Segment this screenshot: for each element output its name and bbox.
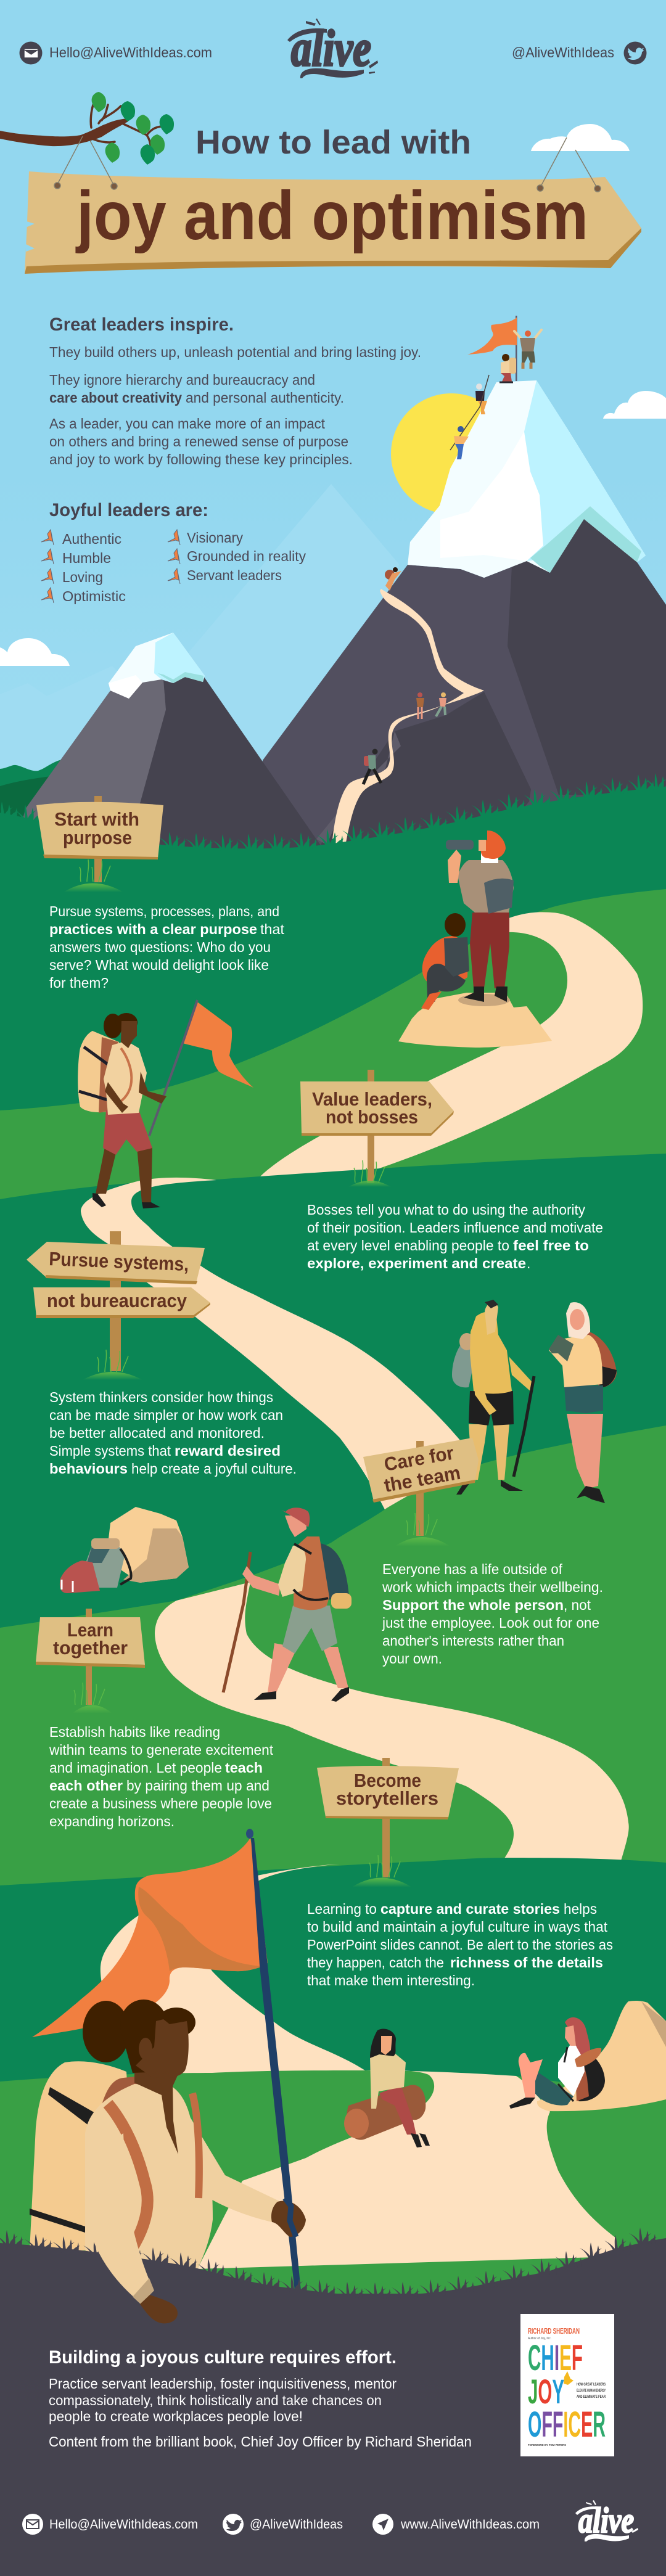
text: learn together: within teams to generate excitement: [49, 1742, 274, 1758]
closing text block: Content from the brilliant book, Chief Joy Officer by Richard Sheridan: [49, 2434, 472, 2450]
text: learn together: by pairing them up and: [126, 1778, 269, 1794]
text: care for the team: just the employee. Look out for one: [382, 1615, 599, 1631]
text: value leaders: at every level enabling people to: [307, 1237, 509, 1253]
two hikers on trail: [416, 692, 446, 719]
light green hill 3: [0, 2070, 666, 2294]
flag cloth: [32, 1838, 268, 2037]
book cover: ELEVATE HUMAN ENERGY: [577, 2389, 606, 2393]
dark green band 2: [0, 1154, 666, 1665]
book cover: RICHARD SHERIDAN: [528, 2326, 580, 2336]
text: value leaders: explore, experiment and create: [307, 1255, 526, 1271]
solo hiker on trail: [363, 749, 381, 784]
text: pursue systems: behaviours: [49, 1461, 128, 1477]
text: become storytellers: PowerPoint slides cannot. Be alert to the stories as: [307, 1937, 613, 1953]
joyful leaders list: Optimistic: [62, 588, 126, 604]
book cover: CHIEF: [528, 2338, 583, 2378]
snow cap: [408, 380, 666, 617]
intro text block: They build others up, unleash potential and bring lasting joy.: [49, 344, 421, 360]
illustration: hiker in headscarf: [549, 1302, 617, 1503]
dark green band 3: [0, 1858, 666, 2158]
heading: how to lead with: How to lead with: [195, 124, 471, 161]
joyful leaders list: Humble: [62, 550, 111, 566]
header: twitter contact: @AliveWithIdeas: [512, 44, 614, 60]
text: pursue systems: [49, 1389, 297, 1477]
intro text block: As a leader, you can make more of an impact: [49, 416, 326, 432]
text: learn together: each other: [49, 1778, 123, 1794]
straps: [108, 2104, 147, 2250]
footer email: Hello@AliveWithIdeas.com: [49, 2517, 198, 2532]
text: become storytellers: capture and curate stories: [380, 1901, 560, 1917]
text: value leaders: of their position. Leaders influence and motivate: [307, 1220, 603, 1236]
text: pursue systems: be better allocated and monitored.: [49, 1425, 265, 1441]
book cover: FOREWORD BY TOM PETERS: [528, 2443, 566, 2447]
torso: [85, 2084, 213, 2281]
text: pursue systems: Simple systems that: [49, 1443, 171, 1459]
trail climber: [385, 567, 401, 591]
sign: value leaders: Value leaders,: [312, 1088, 432, 1110]
illustration: woman sitting on log: [344, 2029, 430, 2147]
sign: value leaders: [300, 1070, 454, 1187]
text: learn together: and imagination. Let people: [49, 1760, 222, 1776]
closing text block: [49, 2347, 472, 2450]
text: start with purpose: serve? What would delight look like: [49, 957, 269, 973]
footer twitter: @AliveWithIdeas: [250, 2517, 343, 2532]
branch with leaves: [0, 92, 174, 165]
right arm: [189, 2115, 281, 2222]
sign mound: [83, 1350, 142, 1380]
footer website: www.AliveWithIdeas.com: [400, 2517, 540, 2532]
book cover: Author of Joy, Inc.: [528, 2337, 551, 2340]
arms: [105, 1072, 166, 1113]
illustration: woman sitting by rock: [509, 2017, 605, 2109]
book cover: JOY: [528, 2372, 564, 2411]
main grass hill: [0, 787, 666, 2294]
sign mound: [395, 1513, 450, 1546]
book cover: HOW GREAT LEADERS: [577, 2383, 606, 2387]
text: care for the team: Everyone has a life outside of: [382, 1561, 563, 1577]
sign mound: [348, 1160, 391, 1187]
illustration: woman with flag: [78, 1000, 253, 1208]
illustration: hiker with walking stick: [223, 1507, 352, 1702]
text: learn together: create a business where people love: [49, 1795, 272, 1811]
footer twitter: [223, 2514, 343, 2535]
legs and shorts: [96, 1147, 152, 1202]
sign: become storytellers: Become: [354, 1770, 421, 1791]
intro text block: and personal authenticity.: [186, 390, 344, 406]
sign: become storytellers: storytellers: [336, 1787, 438, 1809]
text: care for the team: , not: [564, 1597, 591, 1613]
path section 4: [101, 1864, 382, 2078]
intro text block: and joy to work by following these key principles.: [49, 451, 353, 467]
jumping hiker: [514, 330, 541, 369]
sign mound: [72, 1683, 112, 1713]
illustration: hiker in yellow hoodie: [452, 1300, 534, 1495]
text: value leaders: .: [527, 1255, 530, 1271]
book cover: AND ELIMINATE FEAR: [577, 2395, 606, 2399]
sign: learn together: together: [53, 1637, 128, 1659]
sign: learn together: [36, 1609, 145, 1713]
joyful leaders list: Joyful leaders are:: [49, 500, 208, 520]
sand rock: [398, 993, 552, 1048]
collar: [162, 2084, 178, 2154]
summit climbers: [450, 330, 541, 459]
text: become storytellers: Learning to: [307, 1901, 377, 1917]
title sign: [25, 136, 641, 274]
mountain trail: [332, 589, 484, 846]
illustration: rock with two people: [398, 831, 552, 1048]
header: twitter contact: [512, 42, 646, 64]
distant green hills: [0, 760, 86, 832]
footer background: [0, 2238, 666, 2576]
sign: pursue systems not bureaucracy: [27, 1231, 210, 1380]
text: care for the team: work which impacts their wellbeing.: [382, 1579, 603, 1595]
distant pale mountains: [0, 484, 399, 802]
foreground woman left arm and hand: [85, 2133, 178, 2323]
small mountain: [12, 633, 333, 863]
footer website: [372, 2514, 540, 2535]
text: become storytellers: that make them interesting.: [307, 1972, 475, 1988]
closing text block: people to create workplaces people love!: [49, 2408, 303, 2424]
text: care for the team: [382, 1561, 603, 1667]
text: value leaders: [307, 1202, 603, 1271]
small mountain snow: [109, 633, 205, 699]
sign: pursue systems not bureaucracy: Pursue systems,: [49, 1248, 189, 1275]
text: pursue systems: help create a joyful culture.: [131, 1461, 297, 1477]
neck and head: [134, 2059, 179, 2095]
text: pursue systems: System thinkers consider how things: [49, 1389, 273, 1405]
sign ropes and nails: [54, 136, 601, 192]
illustration: foreground woman: [30, 2000, 306, 2281]
cloud: right of peak: [603, 391, 666, 419]
cloud: left: [0, 638, 70, 666]
sitting person: [421, 913, 469, 1010]
white-haired climber: [450, 375, 489, 450]
hand on pole: [271, 2201, 306, 2237]
sky background: [0, 0, 666, 863]
sign: care for the team: Care for: [382, 1442, 455, 1475]
summit flag: [467, 316, 517, 381]
footer logo: alive: [578, 2500, 634, 2540]
joyful leaders list: Loving: [62, 569, 103, 585]
book cover: OFFICER: [528, 2405, 606, 2445]
head: [104, 1014, 122, 1038]
light green hill 2: [0, 1425, 666, 1911]
text: become storytellers: they happen, catch the: [307, 1955, 444, 1971]
footer contacts: [22, 2514, 540, 2535]
path section 1: [247, 912, 643, 1190]
text: learn together: teach: [225, 1760, 263, 1776]
sign: learn together: Learn: [67, 1619, 113, 1641]
joyful leaders list: [41, 500, 306, 604]
text: start with purpose: answers two questions: Who do you: [49, 939, 271, 955]
sign: start with purpose: [36, 796, 163, 892]
text: become storytellers: [307, 1901, 613, 1988]
intro text block: Great leaders inspire.: [49, 314, 234, 335]
sign: become storytellers: [317, 1758, 459, 1887]
footer email: [22, 2514, 198, 2535]
path section 3: [155, 1582, 629, 1865]
kneeling climber: [500, 354, 516, 382]
text: value leaders: feel free to: [513, 1237, 589, 1253]
sign: start with purpose: purpose: [63, 827, 132, 848]
sign: care for the team: the team: [382, 1462, 462, 1496]
path section 5: [197, 2070, 616, 2269]
text: become storytellers: helps: [564, 1901, 597, 1917]
rock right: [537, 2001, 666, 2111]
sign: pursue systems not bureaucracy: not bureaucracy: [47, 1290, 187, 1311]
text: care for the team: another's interests rather than: [382, 1633, 564, 1649]
cloud: top right: [531, 124, 630, 151]
shirt: [104, 1041, 147, 1115]
list flags: [41, 530, 180, 603]
joyful leaders list: Authentic: [62, 531, 121, 547]
man with binoculars: [446, 831, 514, 1002]
sign: start with purpose: Start with: [54, 808, 139, 830]
text: start with purpose: for them?: [49, 975, 109, 991]
backpack: [78, 1031, 119, 1112]
closing text block: Practice servant leadership, foster inquisitiveness, mentor: [49, 2376, 397, 2392]
text: start with purpose: that: [260, 921, 285, 937]
text: care for the team: Support the whole person: [382, 1597, 564, 1613]
blue pants climber: [454, 426, 469, 459]
text: become storytellers: richness of the details: [450, 1955, 603, 1971]
illustration: boulder with backpacks: [60, 1507, 189, 1593]
flag pole finial: [246, 1829, 253, 1839]
joyful leaders list: Servant leaders: [187, 567, 282, 583]
text: learn together: expanding horizons.: [49, 1813, 175, 1829]
sign mound: [352, 1855, 412, 1887]
illustration: foreground flag: [32, 1829, 301, 2291]
text: start with purpose: Pursue systems, processes, plans, and: [49, 903, 279, 919]
text: become storytellers: to build and maintain a joyful culture in ways that: [307, 1919, 608, 1935]
log: [347, 2085, 426, 2140]
closing text block: Building a joyous culture requires effort.: [49, 2347, 397, 2368]
intro text block: care about creativity: [49, 390, 182, 406]
header: logo: alive: [291, 20, 371, 77]
closing text block: compassionately, think holistically and take chances on: [49, 2392, 382, 2408]
intro text block: They ignore hierarchy and bureaucracy and: [49, 372, 315, 388]
intro text block: [49, 314, 421, 467]
text: value leaders: Bosses tell you what to do using the authority: [307, 1202, 585, 1218]
path section 2: [81, 1178, 475, 1517]
header: email contact: [20, 42, 212, 64]
big mountain: [247, 380, 666, 863]
joyful leaders list: Visionary: [187, 530, 243, 546]
light green hill 1: [0, 889, 666, 1208]
text: learn together: Establish habits like reading: [49, 1724, 220, 1740]
text: pursue systems: reward desired: [175, 1443, 281, 1459]
text: start with purpose: [49, 903, 285, 991]
joyful leaders list: Grounded in reality: [187, 548, 306, 564]
flag pole: [251, 1838, 301, 2291]
text: care for the team: your own.: [382, 1651, 442, 1667]
sign mound: [64, 859, 123, 892]
flag: [183, 1002, 253, 1088]
sun: [391, 393, 512, 514]
sign: value leaders: not bosses: [326, 1106, 418, 1128]
intro text block: on others and bring a renewed sense of purpose: [49, 433, 348, 449]
backpack: [30, 2061, 131, 2250]
text: learn together: [49, 1724, 274, 1829]
text: start with purpose: practices with a clear purpose: [49, 921, 257, 937]
footer grass tufts: [0, 2228, 657, 2299]
grass tufts on hill crest: [0, 773, 666, 851]
text: pursue systems: can be made simpler or how work can: [49, 1407, 283, 1423]
book cover: [520, 2314, 614, 2456]
header: email contact: Hello@AliveWithIdeas.com: [49, 44, 212, 60]
sign: care for the team: [363, 1438, 479, 1546]
sign title text: joy and optimism: [75, 178, 588, 254]
